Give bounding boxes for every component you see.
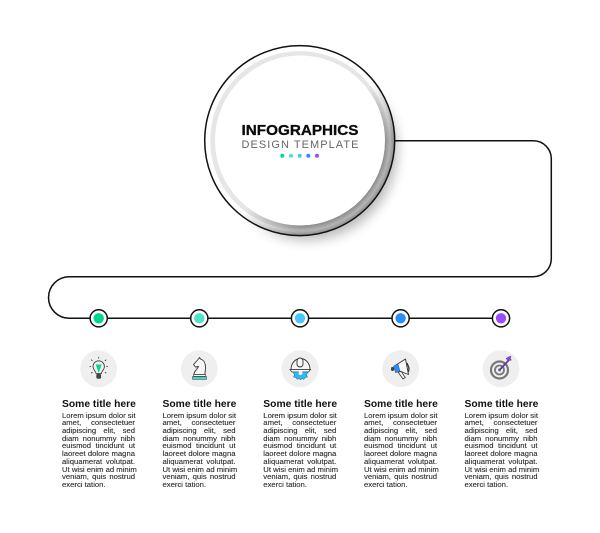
column 3 text: exerci tation. [263,480,307,489]
column 4 text: euismod tincidunt ut [364,441,437,450]
diagram artwork [48,44,552,387]
column 2 text [162,398,237,489]
column 5 text: Lorem ipsum dolor sit [464,410,538,420]
icon: helmet and gear [282,350,318,387]
heading: INFOGRAPHICS [242,122,358,139]
column 2 text: laoreet dolore magna [162,449,236,458]
column 2 text: veniam, quis nostrud [162,472,236,481]
column 1 text: euismod tincidunt ut [62,441,135,450]
column 2 text: adipiscing elit, sed [162,426,236,435]
column 5 text [464,398,539,489]
infographic page [48,44,552,487]
column 5 text: Some title here [464,398,538,410]
subheading: DESIGN TEMPLATE [242,139,358,151]
column 4 text: exerci tation. [364,480,408,489]
column 5 text: euismod tincidunt ut [464,441,538,450]
column 1 text: diam nonummy nibh [62,434,135,443]
column 2 text: aliquamerat volutpat. [162,457,236,466]
column 4 text: diam nonummy nibh [364,434,437,443]
column 5 text: exerci tation. [464,480,508,489]
column 5 text: Ut wisi enim ad minim [464,465,539,474]
connector line [49,141,551,318]
column 4 text: Lorem ipsum dolor sit [364,410,438,420]
column 3 text: Some title here [263,398,337,410]
column 4 text [364,398,439,489]
column 1 text: adipiscing elit, sed [62,426,135,435]
column 1 text: Lorem ipsum dolor sit [62,410,136,420]
icon: chess knight [181,350,218,387]
column 4 text: Ut wisi enim ad minim [364,465,439,474]
column 5 text: diam nonummy nibh [464,434,538,443]
column 1 text: Ut wisi enim ad minim [62,465,137,474]
column 5 text: aliquamerat volutpat. [464,457,538,466]
column 2 text: exerci tation. [162,480,206,489]
column 3 text: diam nonummy nibh [263,434,336,443]
column 5 text: veniam, quis nostrud [464,472,538,481]
column 1 text: exerci tation. [62,480,106,489]
column 3 text: adipiscing elit, sed [263,426,336,435]
column 2 text: Some title here [162,398,236,410]
column 5 text: laoreet dolore magna [464,449,538,458]
column 4 text: veniam, quis nostrud [364,472,437,481]
column 3 text: Lorem ipsum dolor sit [263,410,337,420]
column 3 text: veniam, quis nostrud [263,472,336,481]
icon: light bulb [80,350,117,387]
column 3 text: aliquamerat volutpat. [263,457,336,466]
column 3 text: Ut wisi enim ad minim [263,465,338,474]
column 1 text: amet, consectetuer [62,418,135,427]
column 1 text: Some title here [62,398,136,410]
column 2 text: amet, consectetuer [162,418,236,427]
column 4 text: amet, consectetuer [364,418,437,427]
colour dots [280,154,319,158]
column 4 text: laoreet dolore magna [364,449,437,458]
column 1 text: aliquamerat volutpat. [62,457,135,466]
node 2 [191,310,208,327]
column 2 text: Lorem ipsum dolor sit [162,410,236,420]
column 3 text: amet, consectetuer [263,418,336,427]
central circle badge [205,46,397,240]
column 5 text: adipiscing elit, sed [464,426,538,435]
icon: megaphone [382,350,419,387]
icon: target with dart [483,350,519,387]
column 1 text: laoreet dolore magna [62,449,135,458]
column 2 text: diam nonummy nibh [162,434,236,443]
column 3 text: laoreet dolore magna [263,449,336,458]
column 3 text [263,398,338,489]
column 3 text: euismod tincidunt ut [263,441,336,450]
column 4 text: adipiscing elit, sed [364,426,437,435]
node 4 [392,310,409,327]
column 1 text: veniam, quis nostrud [62,472,135,481]
node 1 [90,310,107,327]
column 2 text: euismod tincidunt ut [162,441,236,450]
column 1 text [62,398,137,489]
node 3 [291,310,309,327]
column 2 text: Ut wisi enim ad minim [162,465,237,474]
node 5 [492,310,510,327]
column 5 text: amet, consectetuer [464,418,538,427]
column 4 text: Some title here [364,398,438,410]
column 4 text: aliquamerat volutpat. [364,457,437,466]
